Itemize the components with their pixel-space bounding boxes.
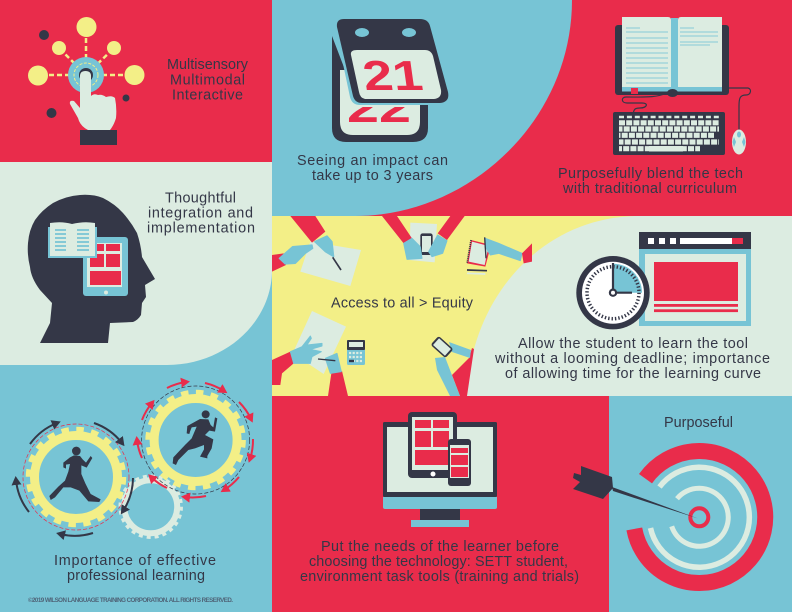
right gear arrows bbox=[137, 382, 253, 497]
text: copyright: ©2019 WILSON LANGUAGE TRAINING CORPORATION. ALL RIGHTS RESERVED. bbox=[28, 597, 233, 604]
right runner bbox=[173, 410, 217, 465]
text: allow the student bbox=[494, 336, 770, 382]
icon: target with dart bbox=[573, 451, 765, 583]
panel: learning time bbox=[494, 232, 770, 382]
icon: top-right notebook and pen bbox=[467, 237, 532, 274]
mouse bbox=[732, 130, 746, 154]
icon: bottom-left hands with paper bbox=[272, 311, 348, 396]
keyboard bbox=[613, 112, 725, 155]
right gear bbox=[148, 392, 243, 488]
icon: monitor, tablet and phone bbox=[383, 412, 497, 527]
icon: touch hand with nodes bbox=[28, 17, 144, 145]
panel: multisensory background bbox=[0, 0, 272, 162]
panel: purposeful blend background bbox=[272, 0, 792, 216]
text: seeing an impact: Seeing an impact can bbox=[297, 153, 448, 169]
text: allow the student: of allowing time for the learning curve bbox=[505, 366, 761, 382]
text: put the needs bbox=[300, 539, 579, 585]
text: thoughtful integration and implementation: Thoughtful bbox=[165, 191, 236, 207]
text: put the needs: Put the needs of the learner before bbox=[321, 539, 559, 555]
text: multisensory multimodal interactive: Multimodal bbox=[170, 72, 245, 88]
text: purposefully blend: with traditional curriculum bbox=[562, 181, 737, 197]
text: importance of effective professional learning: Importance of effective bbox=[54, 553, 216, 569]
text: importance of effective professional learning bbox=[54, 553, 216, 584]
text: thoughtful integration and implementation: implementation bbox=[147, 221, 255, 237]
text: access to all: Access to all > Equity bbox=[331, 296, 474, 312]
panel: learner needs background bbox=[272, 396, 609, 612]
icon: clock bbox=[576, 256, 650, 329]
text: put the needs: choosing the technology: SETT student, bbox=[309, 554, 568, 570]
icon: flip calendar bbox=[332, 17, 450, 142]
text: allow the student: Allow the student to learn the tool bbox=[518, 336, 748, 352]
left gear bbox=[28, 430, 124, 524]
book bbox=[615, 25, 729, 95]
icon: gears with runners bbox=[16, 382, 253, 537]
text: multisensory multimodal interactive bbox=[167, 57, 249, 104]
text: thoughtful integration and implementation: integration and bbox=[148, 206, 253, 222]
wires bbox=[622, 88, 750, 130]
text: thoughtful integration and implementation bbox=[147, 191, 255, 237]
panel: purposeful target bbox=[573, 415, 765, 583]
left gear arrows bbox=[16, 423, 133, 536]
icon: bottom-right hands with phone bbox=[431, 336, 474, 396]
text: purposefully blend bbox=[558, 166, 743, 197]
icon: calculator bbox=[347, 340, 365, 365]
text: importance of effective professional learning: professional learning bbox=[67, 568, 205, 584]
panel: purposeful blend bbox=[558, 17, 750, 197]
icon: flip calendar: 21 bbox=[360, 53, 426, 100]
panel: access background bbox=[272, 216, 672, 396]
dashed gear rings bbox=[23, 386, 250, 530]
panel: professional learning bbox=[16, 382, 253, 604]
text: multisensory multimodal interactive: Interactive bbox=[172, 88, 243, 104]
text: seeing an impact bbox=[297, 153, 448, 184]
text: seeing an impact: take up to 3 years bbox=[312, 168, 433, 184]
text: purposeful: Purposeful bbox=[664, 415, 733, 431]
icon: head with book and tablet bbox=[28, 195, 155, 343]
panel: multisensory bbox=[28, 17, 249, 145]
panel: learning time background bbox=[467, 216, 792, 396]
panel: thoughtful integration bbox=[28, 191, 255, 343]
icon: flip calendar: 22 bbox=[347, 84, 411, 131]
text: purposefully blend: Purposefully blend the tech bbox=[558, 166, 743, 182]
small gear bbox=[120, 476, 181, 537]
panel: access bbox=[272, 216, 532, 396]
panel: impact timeline bbox=[297, 17, 450, 184]
panel: purposeful target background bbox=[609, 396, 792, 612]
panel: thoughtful integration background bbox=[0, 162, 272, 365]
text: allow the student: without a looming deadline; importance bbox=[494, 351, 770, 367]
panel: impact timeline background bbox=[272, 0, 572, 216]
text: multisensory multimodal interactive: Multisensory bbox=[167, 57, 249, 73]
icon: browser window bbox=[639, 232, 751, 326]
icon: top-left hands with paper bbox=[272, 216, 361, 286]
panel: professional learning background bbox=[0, 270, 272, 612]
icon: book with keyboard and mouse bbox=[613, 17, 750, 155]
panel: learner needs bbox=[300, 412, 579, 585]
icon: top-centre hands with phone bbox=[382, 216, 465, 262]
text: put the needs: environment task tools (training and trials) bbox=[300, 569, 579, 585]
left runner bbox=[49, 447, 101, 502]
